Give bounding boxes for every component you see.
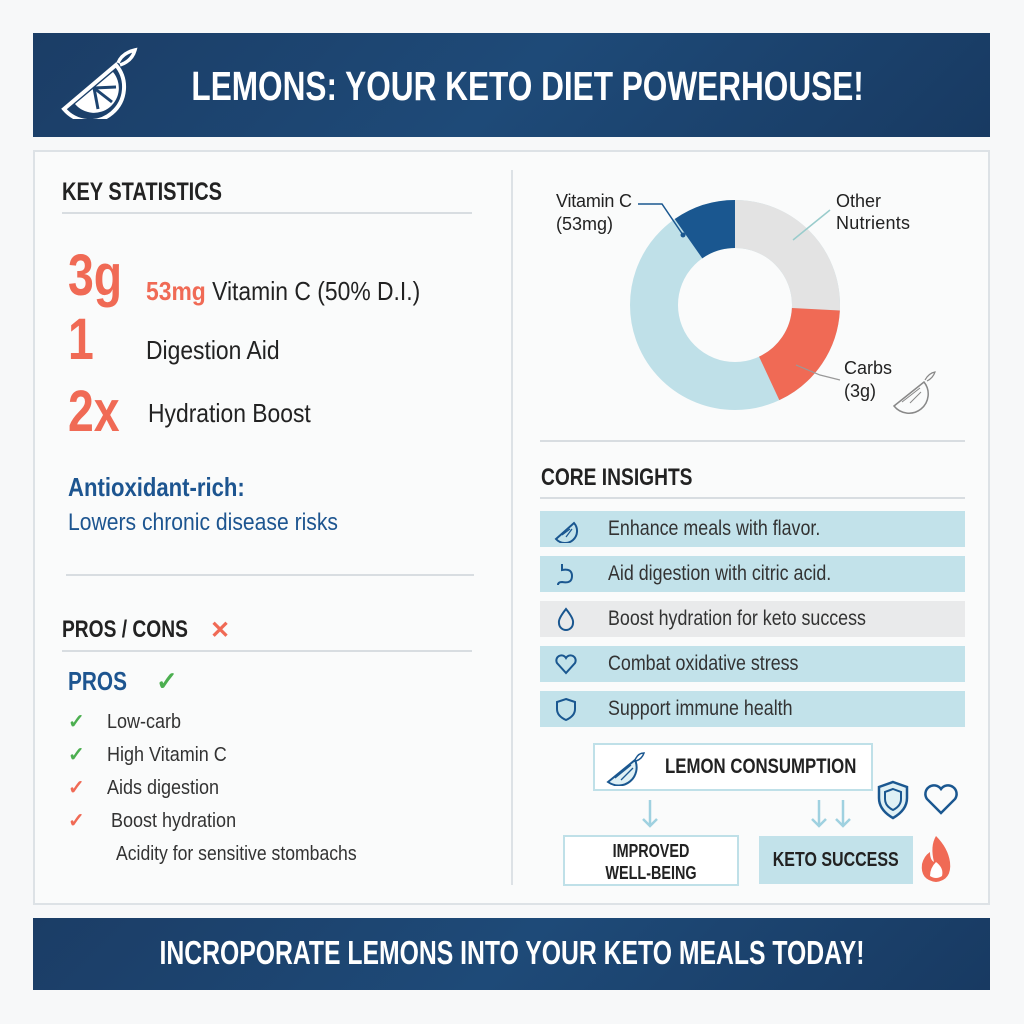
subheading: pros: [68, 666, 178, 696]
stat 3g: 3g: [68, 243, 122, 308]
row: digestion: Aid digestion with citric acid.: [608, 562, 831, 585]
box: keto success: KETO SUCCESS: [773, 848, 899, 870]
list: Aids digestion: [107, 777, 219, 799]
text: antioxidant: Antioxidant-rich:: [68, 472, 245, 502]
label: other nutrients: Nutrients: [836, 213, 910, 233]
label: vitamin c: Vitamin C: [556, 191, 632, 211]
stat 2x: 2x: [68, 379, 120, 444]
row: flavor: Enhance meals with flavor.: [608, 517, 820, 540]
title: LEMONS: YOUR KETO DIET POWERHOUSE!: [191, 63, 864, 109]
stat 3g: 53mg Vitamin C (50% D.I.): [146, 276, 420, 306]
panel: pros / cons: ✓: [156, 666, 178, 696]
list: Acidity for sensitive stombachs: [116, 843, 357, 865]
icon: fire: [922, 836, 950, 882]
footer text: INCROPORATE LEMONS INTO YOUR KETO MEALS TODAY!: [159, 934, 864, 971]
box: lemon consumption: LEMON CONSUMPTION: [665, 755, 856, 778]
footer banner: [33, 918, 990, 990]
main panel: [33, 150, 990, 905]
list: ✓: [68, 810, 85, 832]
heading: pros / cons: PROS / CONS: [62, 616, 188, 643]
panel: key statistics: [62, 178, 474, 576]
stat 3g: [68, 243, 420, 308]
subheading: pros: PROS: [68, 666, 127, 696]
box: improved well-being: IMPROVED: [613, 841, 689, 861]
row: flavor: [540, 511, 965, 547]
row: immune: [540, 691, 965, 727]
row: oxidative: [540, 646, 965, 682]
stat 2x: Hydration Boost: [148, 398, 311, 428]
row: immune: Support immune health: [608, 697, 793, 720]
panel: pros / cons: [62, 616, 472, 865]
label: carbs: (3g): [844, 381, 876, 401]
label: vitamin c: (53mg): [556, 214, 613, 234]
label: carbs: Carbs: [844, 358, 892, 378]
stat 1: Digestion Aid: [146, 335, 280, 365]
list: ✓: [68, 744, 85, 766]
label: carbs: [796, 358, 935, 413]
insight rows: [540, 511, 965, 727]
list: High Vitamin C: [107, 744, 226, 766]
label: other nutrients: Other: [836, 191, 881, 211]
label: other nutrients: [793, 191, 910, 240]
heading: core insights: CORE INSIGHTS: [541, 464, 692, 491]
box: keto success: [759, 836, 913, 884]
icons: shield and heart: [878, 780, 958, 820]
list: Low-carb: [107, 711, 181, 733]
icon: lemon slice: [61, 48, 138, 119]
label: vitamin c: [556, 191, 686, 238]
row: digestion: [540, 556, 965, 592]
box: lemon consumption: [593, 743, 873, 791]
arrows: [642, 800, 851, 828]
donut chart: [556, 191, 936, 414]
box: improved well-being: [563, 835, 739, 886]
row: hydration: Boost hydration for keto success: [608, 607, 866, 630]
list: [68, 711, 357, 865]
box: improved well-being: WELL-BEING: [605, 863, 697, 883]
list: Boost hydration: [111, 810, 236, 832]
flowchart: [563, 743, 958, 886]
text: antioxidant: [68, 472, 338, 536]
stat 1: [68, 307, 280, 372]
row: hydration: [540, 601, 965, 637]
list: ✓: [68, 711, 85, 733]
stat 2x: [68, 379, 311, 444]
heading: key statistics: KEY STATISTICS: [62, 178, 222, 206]
header banner: [33, 33, 990, 137]
text: antioxidant: Lowers chronic disease risks: [68, 509, 338, 536]
list: ✓: [68, 777, 85, 799]
stat 1: 1: [68, 307, 94, 372]
panel: pros / cons: ✕: [210, 617, 230, 644]
row: oxidative: Combat oxidative stress: [608, 652, 798, 675]
